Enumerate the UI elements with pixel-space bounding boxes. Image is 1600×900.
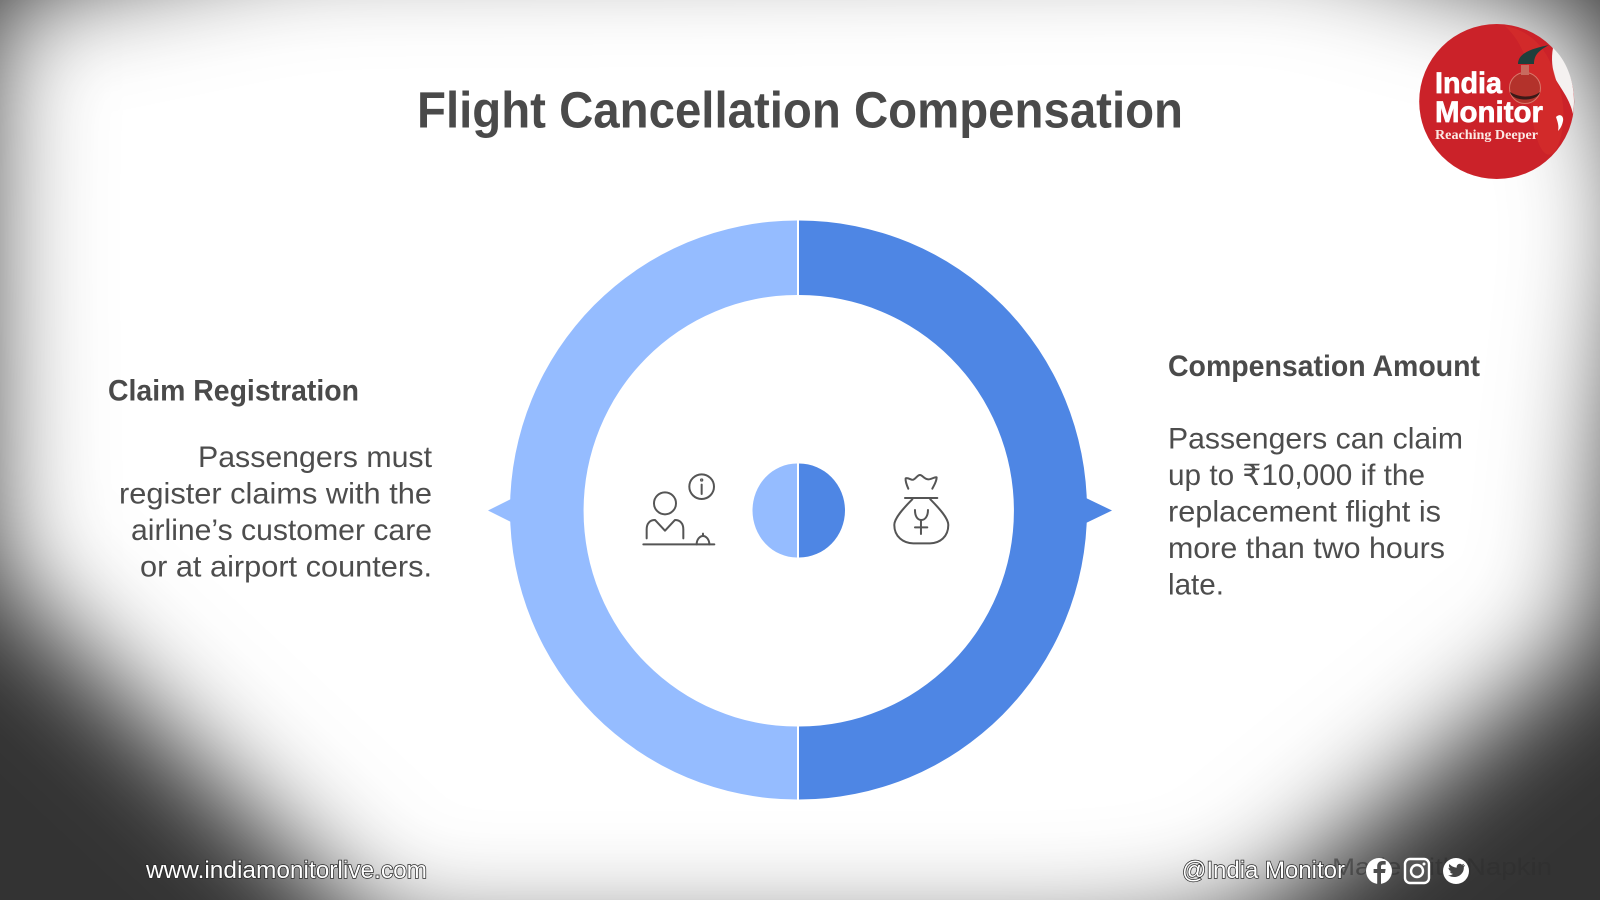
icon: twitter bbox=[1443, 858, 1469, 884]
icon: facebook bbox=[1366, 858, 1392, 884]
icon: person at information desk bbox=[643, 474, 714, 544]
social handle: @India Monitor bbox=[1182, 857, 1345, 884]
title: Flight Cancellation Compensation bbox=[417, 82, 1183, 138]
logo: India Monitor bbox=[1419, 24, 1574, 179]
ring chart bbox=[488, 220, 1112, 800]
body: compensation amount: late. bbox=[1168, 569, 1224, 601]
heading: claim registration: Claim Registration bbox=[108, 376, 359, 408]
body: compensation amount: more than two hours bbox=[1168, 533, 1445, 565]
heading: compensation amount: Compensation Amount bbox=[1168, 351, 1480, 383]
body: compensation amount: Passengers can claim bbox=[1168, 423, 1463, 455]
ring segment: compensation amount bbox=[799, 220, 1112, 800]
ring segment: claim registration bbox=[488, 220, 797, 800]
website url: www.indiamonitorlive.com bbox=[145, 857, 427, 884]
logo: India Monitor: Reaching Deeper bbox=[1435, 127, 1538, 142]
logo: India Monitor: India bbox=[1435, 67, 1502, 100]
body: claim registration: register claims with the bbox=[119, 479, 432, 511]
body: compensation amount bbox=[1168, 423, 1463, 601]
body: claim registration: airline’s customer care bbox=[131, 515, 432, 547]
text block: claim registration bbox=[108, 376, 432, 584]
logo: India Monitor: Monitor bbox=[1435, 96, 1543, 129]
body: claim registration: or at airport counters. bbox=[140, 552, 432, 584]
icon: instagram bbox=[1405, 859, 1429, 883]
text block: compensation amount bbox=[1168, 351, 1480, 601]
body: claim registration bbox=[119, 442, 432, 584]
icon: money bag bbox=[894, 475, 948, 543]
body: compensation amount: up to ₹10,000 if the bbox=[1168, 460, 1425, 492]
body: claim registration: Passengers must bbox=[198, 442, 432, 474]
body: compensation amount: replacement flight is bbox=[1168, 496, 1441, 528]
center split circle bbox=[752, 464, 845, 558]
faint made with napkin mark: Made with Napkin bbox=[1332, 854, 1552, 881]
